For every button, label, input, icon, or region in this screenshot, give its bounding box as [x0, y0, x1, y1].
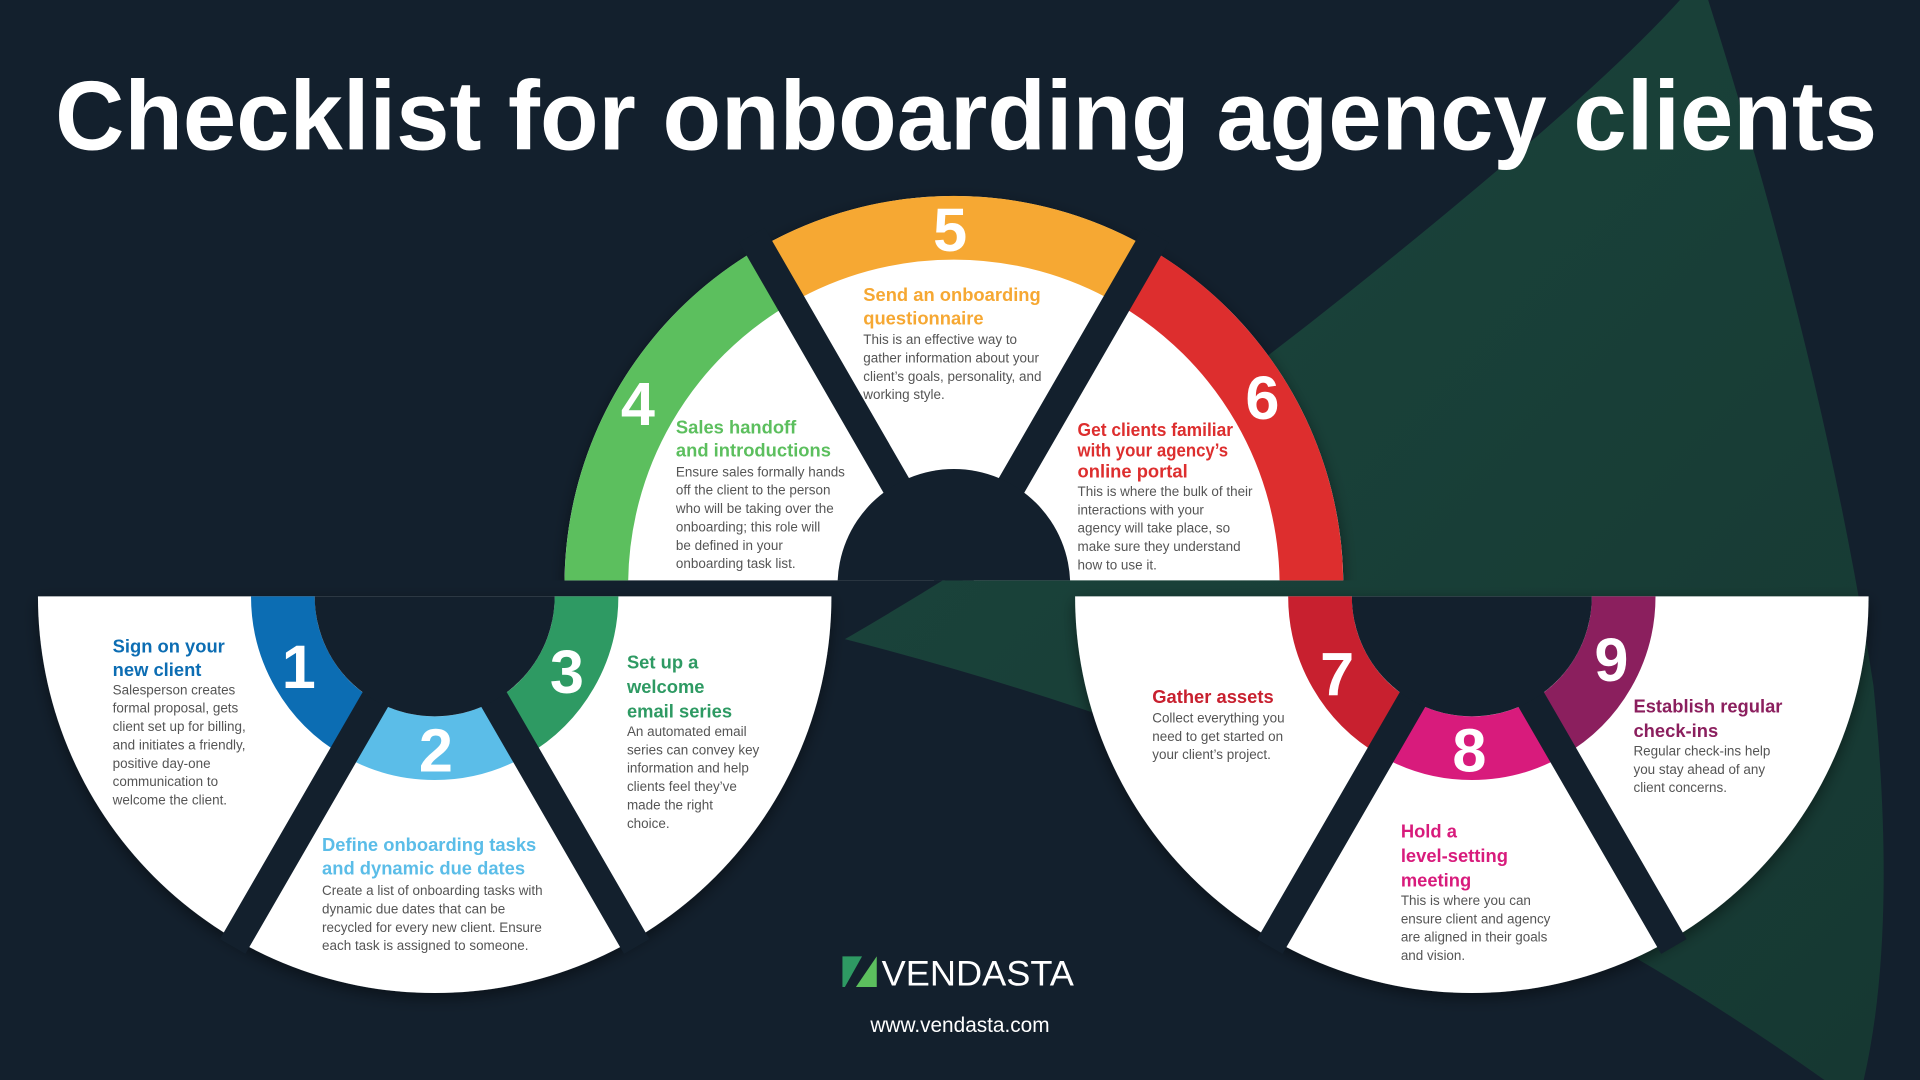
- step 5: gather information about your: [863, 350, 1040, 365]
- step 2: and dynamic due dates: [322, 857, 525, 878]
- step 1: client set up for billing,: [113, 719, 246, 734]
- step 2: each task is assigned to someone.: [322, 938, 528, 953]
- step 3: 3: [550, 638, 584, 706]
- step 8: This is where you can: [1401, 893, 1531, 908]
- step 6: This is where the bulk of their: [1078, 484, 1253, 499]
- step 1: formal proposal, gets: [113, 701, 239, 716]
- step 9: Establish regular: [1633, 696, 1782, 717]
- step 4: onboarding; this role will: [676, 519, 820, 534]
- step 7: Gather assets: [1152, 686, 1274, 707]
- step 5: working style.: [862, 387, 945, 402]
- step 3: email series: [627, 701, 732, 722]
- step 3: welcome: [626, 676, 705, 697]
- step 1: and initiates a friendly,: [113, 737, 246, 752]
- step 2: [322, 716, 543, 953]
- step 4: Ensure sales formally hands: [676, 464, 845, 479]
- step 2: Create a list of onboarding tasks with: [322, 883, 543, 898]
- step 3: Set up a: [627, 652, 699, 673]
- step 3: [550, 638, 760, 831]
- step 4: and introductions: [676, 440, 831, 461]
- step 2: Define onboarding tasks: [322, 834, 536, 855]
- step 6: agency will take place, so: [1078, 521, 1230, 536]
- step 9: check-ins: [1633, 720, 1718, 741]
- website url: www.vendasta.com: [869, 1014, 1050, 1037]
- logo: VENDASTA: [882, 954, 1074, 994]
- panel: bottom-left fan (1,2,3): [38, 596, 831, 993]
- step 6: online portal: [1078, 461, 1188, 482]
- step 4: who will be taking over the: [675, 501, 834, 516]
- step 7: need to get started on: [1152, 729, 1283, 744]
- step 9: 9: [1594, 626, 1628, 694]
- panel: top fan (4,5,6): [564, 196, 1343, 585]
- step 3: An automated email: [627, 724, 747, 739]
- step 1: Sign on your: [113, 636, 225, 657]
- step 2: dynamic due dates that can be: [322, 901, 505, 916]
- step 5: client’s goals, personality, and: [863, 369, 1041, 384]
- step 3: made the right: [627, 797, 713, 812]
- step 3: clients feel they’ve: [627, 779, 737, 794]
- panel: bottom-right fan (7,8,9): [1075, 596, 1869, 993]
- step 6: how to use it.: [1078, 557, 1157, 572]
- step 8: 8: [1452, 716, 1486, 784]
- step 1: positive day-one: [113, 756, 211, 771]
- step 4: onboarding task list.: [676, 556, 796, 571]
- step 1: [112, 633, 316, 807]
- step 7: [1152, 641, 1354, 762]
- step 9: you stay ahead of any: [1633, 762, 1765, 777]
- step 9: [1594, 626, 1782, 795]
- step 7: 7: [1320, 641, 1354, 709]
- step 1: welcome the client.: [112, 792, 227, 807]
- background green shape: [845, 0, 1884, 1080]
- step 8: level-setting: [1401, 845, 1508, 866]
- step 1: Salesperson creates: [113, 682, 236, 697]
- step 8: ensure client and agency: [1401, 911, 1551, 926]
- step 5: This is an effective way to: [863, 332, 1017, 347]
- step 8: are aligned in their goals: [1401, 930, 1548, 945]
- step 6: interactions with your: [1078, 502, 1204, 517]
- step 8: Hold a: [1401, 821, 1458, 842]
- step 4: be defined in your: [676, 538, 783, 553]
- icon: vendasta mark: [842, 956, 877, 987]
- step 3: series can convey key: [627, 742, 760, 757]
- step 1: 1: [282, 633, 316, 701]
- step 4: off the client to the person: [676, 483, 830, 498]
- step 6: with your agency’s: [1077, 440, 1228, 461]
- step 3: choice.: [627, 816, 670, 831]
- step 2: 2: [419, 716, 453, 784]
- step 1: communication to: [113, 774, 218, 789]
- step 7: your client’s project.: [1152, 747, 1271, 762]
- title: Checklist for onboarding agency clients: [55, 60, 1877, 170]
- step 3: information and help: [627, 761, 749, 776]
- step 5: [862, 196, 1041, 402]
- step 7: Collect everything you: [1152, 710, 1285, 725]
- step 2: recycled for every new client. Ensure: [322, 920, 542, 935]
- step 1: new client: [113, 659, 201, 680]
- step 8: [1401, 716, 1551, 963]
- step 6: make sure they understand: [1078, 539, 1241, 554]
- step 6: 6: [1245, 364, 1279, 432]
- step 4: 4: [621, 370, 655, 438]
- step 5: Send an onboarding: [863, 284, 1041, 305]
- step 6: Get clients familiar: [1078, 419, 1233, 440]
- step 6: [1077, 364, 1279, 572]
- step 5: 5: [933, 196, 967, 264]
- step 4: [621, 370, 845, 571]
- step 5: questionnaire: [863, 307, 984, 328]
- step 9: Regular check-ins help: [1633, 744, 1770, 759]
- step 9: client concerns.: [1633, 780, 1727, 795]
- step 4: Sales handoff: [676, 416, 797, 437]
- step 8: meeting: [1401, 870, 1471, 891]
- step 8: and vision.: [1401, 948, 1465, 963]
